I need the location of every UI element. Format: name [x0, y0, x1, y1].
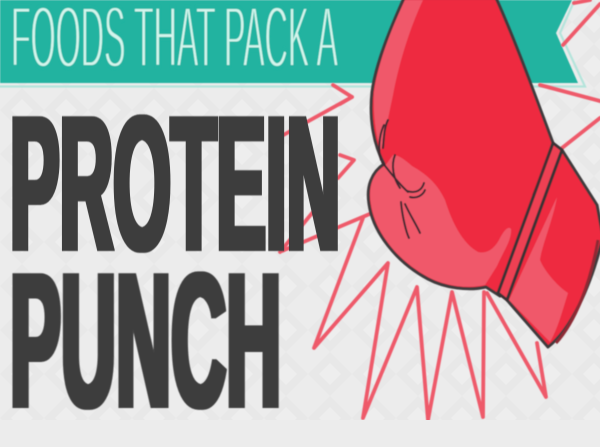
cuff shadow edge [556, 240, 598, 343]
glove body [368, 0, 553, 296]
icon: red boxing glove [368, 0, 600, 347]
banner: teal ribbon [0, 0, 585, 86]
thumb crease lines [379, 120, 425, 238]
starburst lines [278, 0, 600, 420]
wrist band [498, 143, 562, 300]
title word: punch: PUNCH [10, 234, 281, 446]
glove highlight: upper edge [374, 0, 423, 150]
wrist band crease [533, 148, 552, 195]
title: protein punch [10, 78, 340, 446]
glove highlight: thumb and palm [370, 155, 511, 287]
title word: protein: PROTEIN [10, 78, 340, 290]
cuff highlight [509, 197, 568, 342]
cuff [507, 150, 600, 347]
